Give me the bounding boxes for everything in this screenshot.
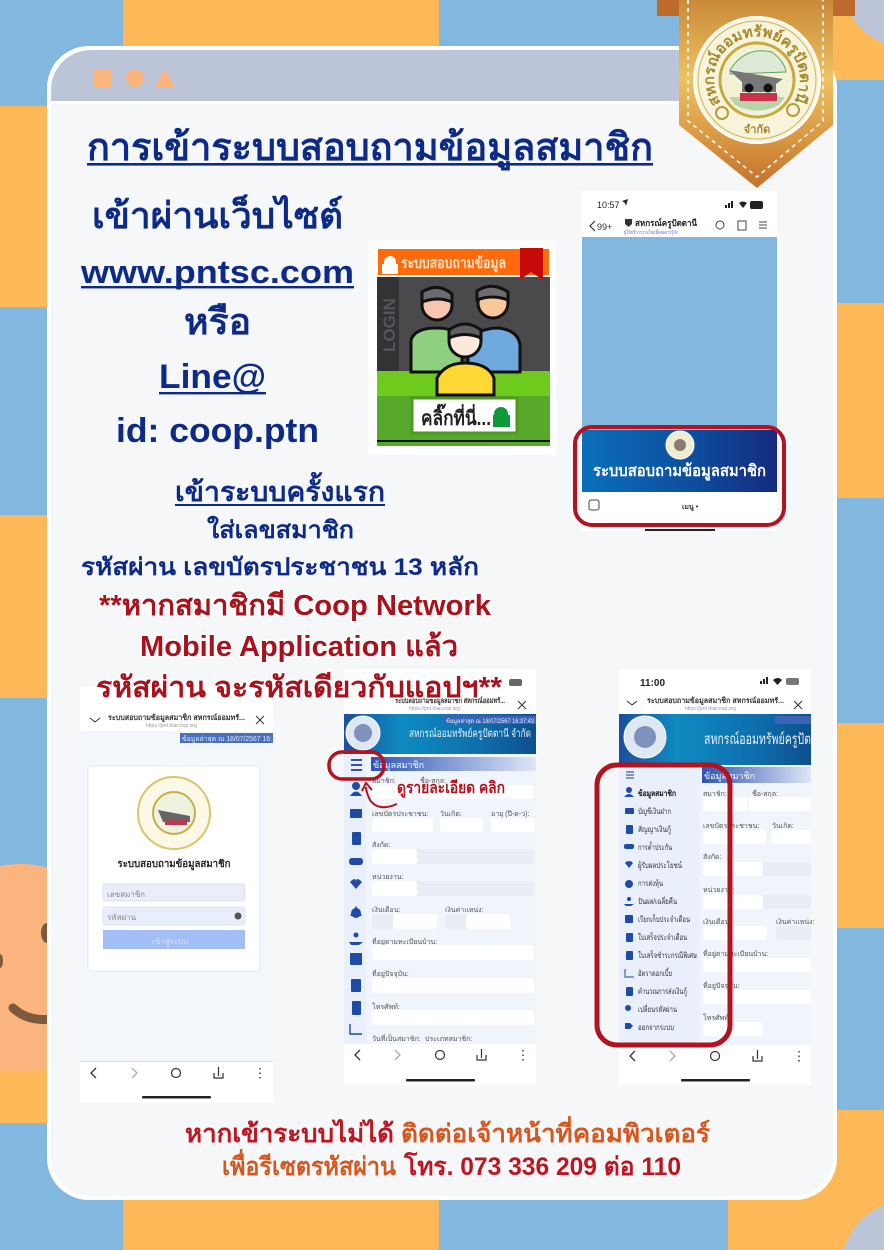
phone screenshot: login screen: เลขสมาชิก <box>107 890 145 899</box>
window control shapes <box>94 69 175 87</box>
access instructions text block: Line@ <box>159 358 266 396</box>
phone screenshot: LINE official account: ผู้ให้บริการรายใหม่ที่คุณควรรู้จัก <box>624 229 678 236</box>
first login instructions: ใส่เลขสมาชิก <box>207 515 354 544</box>
access instructions text block: id: coop.ptn <box>116 412 319 450</box>
first login instructions: รหัสผ่าน เลขบัตรประชาชน 13 หลัก <box>81 554 479 581</box>
phone screenshot: LINE official account: 99+ <box>597 222 612 232</box>
form fields <box>372 776 535 1043</box>
phone screenshot: member data page: ข้อมูลสมาชิก <box>373 760 424 771</box>
phone screenshot: expanded menu: ระบบสอบถามข้อมูลสมาชิก สหกรณ์ออมทรั... <box>647 696 784 706</box>
phone screenshot: login screen: ระบบสอบถามข้อมูลสมาชิก สหกรณ์ออมทรั... <box>108 713 245 723</box>
phone screenshot: login screen: ระบบสอบถามข้อมูลสมาชิก <box>118 858 230 871</box>
form fields: วันเกิด: <box>440 810 462 818</box>
arrow: points to menu button <box>362 783 397 807</box>
first login instructions <box>81 471 479 581</box>
footer contact text: เพื่อรีเซตรหัสผ่าน <box>222 1149 396 1181</box>
phone screenshot: login screen <box>80 687 273 1103</box>
callout: red ring on menu button <box>329 752 384 779</box>
form fields behind menu <box>703 789 815 1036</box>
sidebar menu: เปลี่ยนรหัสผ่าน <box>638 1003 677 1014</box>
access instructions text block <box>80 193 354 450</box>
sidebar menu: อัตราดอกเบี้ย <box>638 967 672 978</box>
sidebar menu: การค้ำประกัน <box>638 841 672 852</box>
form fields behind menu: หน่วยงาน: <box>703 887 735 894</box>
red note: Coop Network app password: Mobile Application แล้ว <box>140 631 458 663</box>
form fields: เงินเดือน: <box>372 906 401 914</box>
red note: Coop Network app password: **หากสมาชิกมี Coop Network <box>99 590 492 622</box>
ribbon badge with cooperative seal <box>657 0 855 188</box>
form fields behind menu: เงินเดือน: <box>703 918 732 926</box>
phone screenshot: LINE official account <box>575 191 784 531</box>
form fields: สังกัด: <box>372 841 390 849</box>
sidebar menu: บัญชีเงินฝาก <box>638 807 671 816</box>
phone screenshot: expanded menu: ข้อมูลสมาชิก <box>704 771 755 782</box>
sidebar menu: ผู้รับผลประโยชน์ <box>638 860 682 871</box>
form fields: หน่วยงาน: <box>372 874 404 881</box>
red note: Coop Network app password: รหัสผ่าน จะรหัสเดียวกับแอปฯ** <box>96 672 503 704</box>
form fields: อายุ (ปี-ด-ว): <box>491 810 529 818</box>
sidebar menu: ปันผล/เฉลี่ยคืน <box>638 895 677 906</box>
form fields behind menu: ที่อยู่ปัจจุบัน: <box>703 981 740 990</box>
phone screenshot: LINE official account: 10:57 <box>597 200 620 210</box>
phone screenshot: member data page: สหกรณ์ออมทรัพย์ครูปัตตานี จำกัด <box>409 727 531 740</box>
ribbon badge with cooperative seal: สหกรณ์ออมทรัพย์ครูปัตตานี <box>705 24 809 106</box>
form fields behind menu: ที่อยู่ตามทะเบียนบ้าน: <box>703 949 768 958</box>
phone screenshot: member data page <box>329 669 536 1085</box>
sidebar menu: ออกจากระบบ <box>638 1023 674 1032</box>
form fields: เลขบัตรประชาชน: <box>372 810 428 818</box>
footer contact text <box>185 1116 711 1181</box>
icon: three members <box>411 286 520 395</box>
phone screenshot: login screen: เข้าสู่ระบบ <box>152 937 188 947</box>
phone screenshot: member data page: ระบบสอบถามข้อมูลสมาชิก สหกรณ์ออมทรั... <box>395 696 505 706</box>
sidebar menu: ข้อมูลสมาชิก <box>638 788 676 799</box>
callout label: click for details: ดูรายละเอียด คลิก <box>397 778 505 799</box>
sidebar menu: เรียกเก็บประจำเดือน <box>638 914 690 924</box>
ribbon badge with cooperative seal: จำกัด <box>744 123 770 136</box>
smiley face decoration <box>0 864 124 1072</box>
form fields behind menu: โทรศัพท์: <box>703 1013 731 1022</box>
title: การเข้าระบบสอบถามข้อมูลสมาชิก <box>87 127 653 171</box>
form fields behind menu: วันเกิด: <box>772 822 794 830</box>
sidebar menu: ใบเสร็จประจำเดือน <box>638 932 687 942</box>
phone screenshot: expanded menu: https://pnt.thaicoop.org <box>685 706 736 712</box>
footer contact text: หากเข้าระบบไม่ได้ <box>185 1118 394 1148</box>
phone screenshot: LINE official account: ระบบสอบถามข้อมูลสมาชิก <box>593 462 766 482</box>
form fields behind menu: ชื่อ-สกุล: <box>752 789 778 798</box>
callout: red highlight on sidebar menu <box>597 765 730 1045</box>
red note: Coop Network app password <box>96 590 503 704</box>
access instructions text block: www.pntsc.com <box>80 254 354 290</box>
form fields: เงินค่าแหน่ง: <box>445 906 484 914</box>
phone screenshot: LINE official account: เมนู • <box>682 504 699 512</box>
form fields: ที่อยู่ปัจจุบัน: <box>372 969 409 978</box>
sidebar menu: การส่งหุ้น <box>638 879 663 888</box>
form fields behind menu: เงินค่าแหน่ง: <box>776 918 815 926</box>
phone screenshot: member data page: https://pnt.thaicoop.org <box>409 706 460 712</box>
access instructions text block: เข้าผ่านเว็บไซต์ <box>92 193 343 236</box>
phone screenshot: expanded menu: 11:00 <box>640 678 665 689</box>
login banner image: ระบบสอบถามข้อมูล <box>401 255 506 273</box>
login banner image: LOGIN <box>380 298 399 352</box>
first login instructions: เข้าระบบครั้งแรก <box>175 471 385 507</box>
phone screenshot: login screen: ข้อมูลล่าสุด ณ 18/07/2567 16: <box>182 735 272 743</box>
sidebar menu: สัญญาเงินกู้ <box>638 825 671 835</box>
phone screenshot: login screen: รหัสผ่าน <box>107 913 137 922</box>
phone screenshot: LINE official account: สหกรณ์ครูปัตตานี <box>635 217 698 229</box>
login banner image: คลิ๊กที่นี่... <box>421 403 491 430</box>
sidebar menu <box>619 765 700 1045</box>
sidebar menu: คำนวณการส่งเงินกู้ <box>638 987 687 997</box>
footer contact text: โทร. 073 336 209 ต่อ 110 <box>403 1151 681 1181</box>
phone screenshot: expanded menu <box>597 669 815 1085</box>
callout: red highlight on member menu <box>575 427 784 525</box>
form fields: ที่อยู่ตามทะเบียนบ้าน: <box>372 937 437 946</box>
phone screenshot: login screen: https://pnt.thaicoop.org <box>146 723 197 729</box>
form fields: โทรศัพท์: <box>372 1002 400 1011</box>
form fields behind menu: สมาชิก: <box>703 790 727 798</box>
sidebar menu: ใบเสร็จชำระกรณีพิเศษ <box>638 950 697 960</box>
form fields: ชื่อ-สกุล: <box>420 776 446 785</box>
phone screenshot: expanded menu: สหกรณ์ออมทรัพย์ครูปัต <box>704 731 811 748</box>
form fields: ประเภทสมาชิก: <box>425 1035 472 1043</box>
form fields behind menu: เลขบัตรประชาชน: <box>703 822 759 830</box>
form fields behind menu: สังกัด: <box>703 853 721 861</box>
login banner image <box>368 240 556 455</box>
phone screenshot: member data page: ข้อมูลล่าสุด ณ 18/07/2567 16:37:43 <box>446 718 535 725</box>
form fields: วันที่เป็นสมาชิก: <box>372 1034 421 1043</box>
form fields: สมาชิก: <box>372 777 396 785</box>
access instructions text block: หรือ <box>184 301 251 342</box>
footer contact text: ติดต่อเจ้าหน้าที่คอมพิวเตอร์ <box>401 1116 711 1148</box>
sidebar icons <box>349 782 363 1034</box>
